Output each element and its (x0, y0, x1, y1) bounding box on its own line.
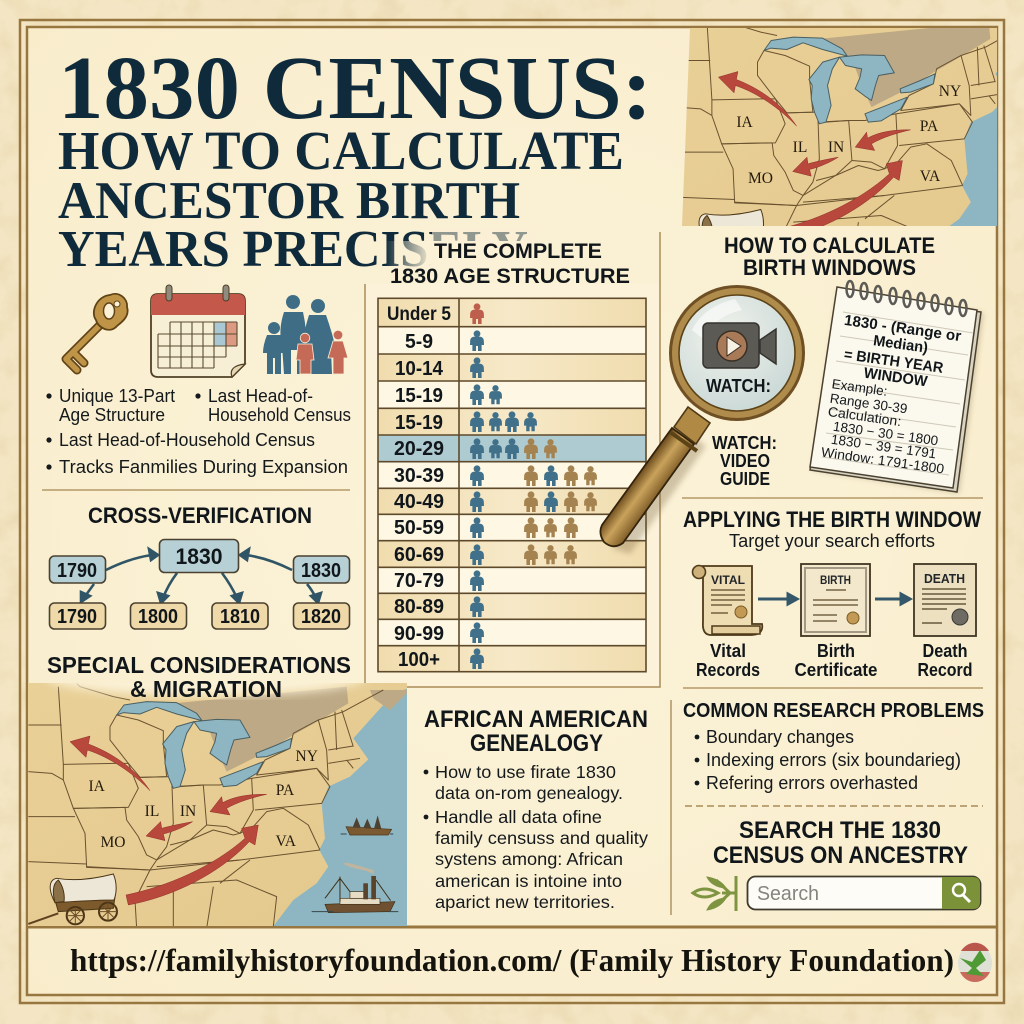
bottom left migration map (28, 683, 407, 926)
icon: key (66, 294, 128, 370)
special considerations heading (47, 652, 351, 702)
soft fade over the upper edge of the hidden title letters (432, 228, 535, 241)
panel: african american genealogy: GENEALOGY (470, 730, 603, 757)
age labels: 60-69 (394, 544, 444, 566)
top right migration map: IL (793, 139, 807, 156)
age table (378, 298, 646, 672)
column divider (670, 700, 672, 915)
icon: magnifying glass with video camera (600, 285, 805, 554)
icon: death record: DEATH (924, 572, 965, 586)
age labels: 20-29 (394, 438, 444, 460)
age labels: 50-59 (394, 517, 444, 539)
top right migration map: MO (748, 170, 773, 187)
year labels: 1800 (138, 606, 178, 628)
title: YEARS PRECISELY (58, 221, 528, 278)
how to calculate heading: BIRTH WINDOWS (743, 255, 916, 280)
panel: african american genealogy: data on-rom genealogy. (435, 783, 623, 803)
notebook text: 1830 − 39 = 1791 (830, 432, 937, 461)
notebook text: Example: (831, 376, 888, 399)
notebook text: 1830 − 30 = 1800 (832, 419, 939, 448)
panel: african american genealogy: american is intoine into (435, 871, 622, 891)
age labels: 70-79 (394, 570, 444, 592)
video guide label: VIDEO (720, 451, 770, 471)
bottom left migration map: VA (276, 833, 297, 850)
applying heading: Target your search efforts (729, 531, 935, 551)
icon: calendar (151, 285, 245, 377)
year labels: 1830 (176, 544, 222, 569)
cross-verification diagram (50, 540, 350, 629)
pictogram people (470, 303, 597, 669)
icon: footer seal (958, 943, 992, 982)
icon: vital records scroll: VITAL (711, 573, 745, 587)
common research problems: Refering errors overhasted (706, 773, 918, 793)
title: 1830 CENSUS: (58, 39, 652, 138)
dashed divider (685, 805, 983, 807)
divider (42, 489, 350, 491)
notebook text: = BIRTH YEAR (843, 346, 944, 377)
title: HOW TO CALCULATE (58, 120, 624, 181)
year labels (57, 544, 341, 628)
search call to action heading (713, 817, 968, 869)
how to calculate heading (724, 233, 935, 280)
age labels: 5-9 (405, 331, 433, 353)
notebook text: WINDOW (863, 365, 929, 391)
panel: african american genealogy: aparict new territories. (435, 892, 615, 912)
notebook spiral rings (846, 281, 966, 316)
document labels (696, 641, 972, 680)
document labels: Vital (710, 641, 746, 661)
notebook text: Window: 1791-1800 (820, 444, 945, 477)
panel: age structure (365, 232, 660, 687)
document labels: Death (922, 641, 968, 661)
age labels: 30-39 (394, 465, 444, 487)
year labels: 1790 (57, 606, 97, 628)
top right migration map: IN (828, 139, 844, 156)
arrow (875, 594, 910, 604)
top right migration map (682, 28, 997, 226)
age labels: 40-49 (394, 491, 444, 513)
special considerations heading: & MIGRATION (130, 676, 282, 702)
common research problems: Boundary changes (706, 727, 854, 747)
common research problems: Indexing errors (six boundarieg) (706, 750, 961, 770)
document labels: Records (696, 660, 760, 680)
title: ANCESTOR BIRTH (58, 172, 520, 230)
icon: birth certificate: BIRTH (820, 575, 851, 587)
icon: ancestry leaf (693, 876, 736, 911)
notebook text: Range 30-39 (829, 391, 908, 416)
notebook text: 1830 - (Range or (843, 312, 962, 345)
notebook with calculation (810, 281, 983, 493)
document labels: Record (918, 660, 972, 680)
age labels (387, 304, 451, 671)
icon: family (263, 295, 348, 374)
top right migration map: PA (920, 118, 939, 135)
bottom left migration map: IN (180, 803, 196, 820)
text block: key features: Last Head-of- (208, 385, 313, 406)
bottom left migration map: NY (296, 748, 318, 765)
bottom left migration map: IA (89, 778, 106, 795)
applying heading: APPLYING THE BIRTH WINDOW (683, 507, 981, 532)
age labels: Under 5 (387, 304, 451, 325)
panel: african american genealogy: family censuss and quality (435, 828, 648, 848)
search box: Search (757, 883, 819, 905)
icon: magnifying glass with video camera: WATCH: (706, 376, 771, 396)
panel: african american genealogy: AFRICAN AMERICAN (424, 706, 648, 733)
bottom left migration map: MO (101, 834, 125, 851)
age labels: 80-89 (394, 596, 444, 618)
text block: key features: Unique 13-Part (59, 385, 175, 406)
age labels: 90-99 (394, 623, 444, 645)
footer url: https://familyhistoryfoundation.com/ (Family History Foundation) (70, 942, 954, 978)
top right migration map: NY (939, 83, 961, 100)
document labels: Certificate (794, 660, 878, 680)
video guide label (712, 433, 777, 489)
divider (682, 497, 983, 499)
applying heading (683, 507, 981, 551)
age labels: 100+ (398, 649, 440, 671)
notebook text: Calculation: (827, 404, 902, 429)
bottom left migration map: IL (145, 803, 159, 820)
video guide label: GUIDE (720, 469, 770, 489)
search call to action heading: SEARCH THE 1830 (739, 817, 941, 844)
search box (748, 876, 980, 910)
arrow (758, 594, 797, 604)
panel: african american genealogy (424, 706, 648, 912)
text block: key features: Household Census (208, 404, 351, 425)
bottom left migration map: PA (276, 782, 295, 799)
text block: key features (46, 385, 351, 477)
text block: key features: Age Structure (59, 404, 165, 425)
year labels: 1820 (301, 606, 341, 628)
cross-verification heading: CROSS-VERIFICATION (88, 503, 312, 528)
age labels: 10-14 (395, 358, 444, 380)
document labels: Birth (817, 641, 855, 661)
common research problems (683, 700, 984, 793)
age structure heading (390, 240, 630, 288)
panel: african american genealogy: How to use firate 1830 (435, 762, 616, 782)
common research problems: COMMON RESEARCH PROBLEMS (683, 700, 984, 722)
age structure heading: 1830 AGE STRUCTURE (390, 265, 630, 288)
title (58, 39, 652, 278)
icon: birth certificate (801, 564, 870, 636)
top right migration map: IA (736, 114, 753, 131)
year labels: 1830 (301, 560, 341, 582)
search call to action heading: CENSUS ON ANCESTRY (713, 842, 968, 869)
top right migration map: VA (920, 168, 941, 185)
text block: key features: Last Head-of-Household Census (59, 429, 315, 450)
age labels: 15-19 (395, 385, 443, 407)
how to calculate heading: HOW TO CALCULATE (724, 233, 935, 258)
year labels: 1810 (220, 606, 260, 628)
divider (683, 687, 983, 689)
year boxes (50, 540, 350, 629)
special considerations heading: SPECIAL CONSIDERATIONS (47, 652, 351, 678)
year labels: 1790 (57, 560, 97, 582)
notebook text (820, 312, 962, 477)
text block: key features: Tracks Fanmilies During Expansion (59, 456, 348, 477)
icon: vital records scroll (692, 566, 762, 635)
arrows (81, 549, 321, 603)
age labels: 15-19 (395, 412, 443, 434)
fade over the title's last line behind the table heading (385, 241, 535, 272)
icon: death record (914, 564, 976, 636)
age structure heading: THE COMPLETE (434, 240, 602, 263)
video guide label: WATCH: (712, 433, 777, 453)
notebook text: Median) (872, 332, 929, 357)
panel: african american genealogy: Handle all data ofine (435, 807, 602, 827)
panel: african american genealogy: systens among: African (435, 849, 623, 869)
